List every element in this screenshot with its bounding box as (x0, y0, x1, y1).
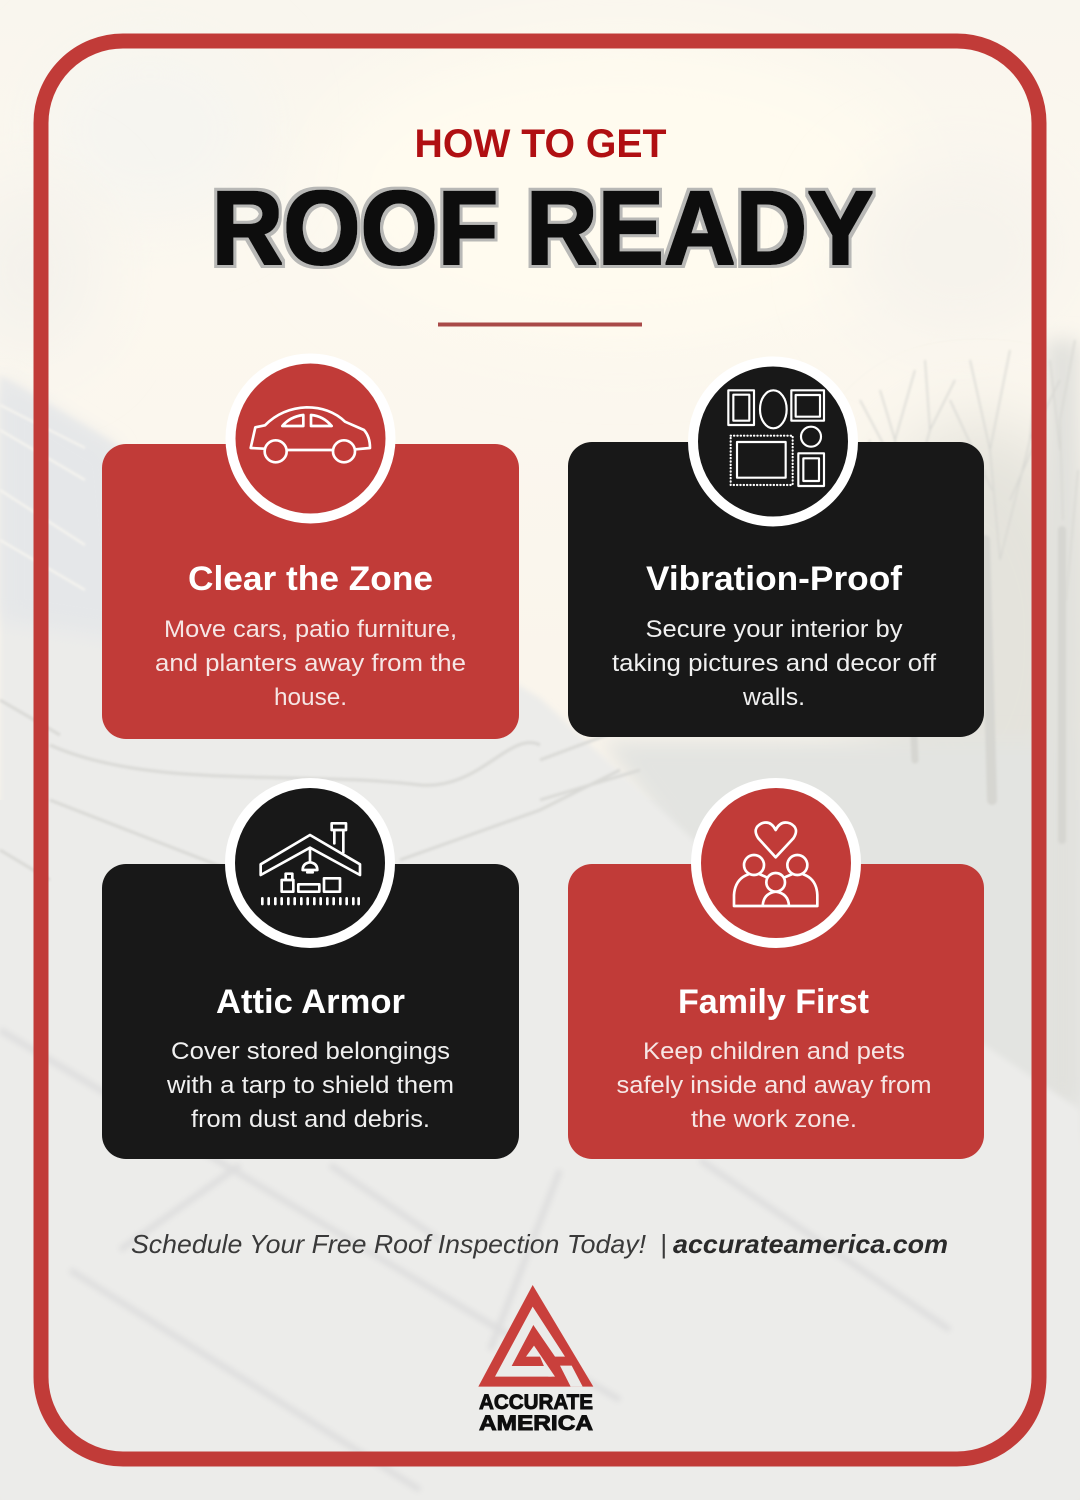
body text: taking pictures and decor off (612, 650, 936, 677)
heading: Attic Armor (216, 983, 405, 1021)
icon: family (734, 822, 817, 906)
heading: Vibration-Proof (646, 560, 903, 598)
eyebrow: how to get: HOW TO GET (414, 122, 666, 166)
body text (612, 616, 936, 711)
badge circle: car (230, 358, 390, 518)
body text: the work zone. (691, 1106, 857, 1133)
logo wordmark: AMERICA (479, 1412, 593, 1435)
badge circle: frames (693, 362, 853, 522)
logo wordmark (479, 1391, 593, 1435)
title divider (438, 322, 642, 326)
card: family first (568, 783, 984, 1159)
call to action: | (660, 1229, 667, 1259)
body text: with a tarp to shield them (166, 1072, 454, 1099)
icon: picture frames (728, 390, 824, 486)
logo mark (478, 1285, 593, 1387)
badge circle: family (696, 783, 856, 943)
body text (616, 1038, 932, 1133)
title block (212, 122, 874, 287)
body text: walls. (742, 684, 805, 711)
icon: attic (261, 823, 360, 904)
heading: Family First (678, 983, 869, 1021)
body text: and planters away from the (155, 650, 466, 677)
body text (155, 616, 466, 711)
body text: Move cars, patio furniture, (164, 616, 457, 643)
body text: safely inside and away from (616, 1072, 932, 1099)
card: clear the zone (102, 358, 519, 739)
call to action: accurateamerica.com (673, 1229, 948, 1259)
call to action: Schedule Your Free Roof Inspection Today! (131, 1229, 646, 1259)
body text (166, 1038, 454, 1133)
body text: house. (274, 684, 347, 711)
main title: roof ready: ROOF READY (212, 170, 874, 287)
icon: car (251, 407, 370, 462)
body text: Secure your interior by (646, 616, 902, 643)
call to action (131, 1229, 948, 1259)
badge circle: attic (230, 783, 390, 943)
card: attic armor (102, 783, 519, 1159)
logo: accurate america (478, 1285, 593, 1435)
card: vibration-proof (568, 362, 984, 737)
body text: Cover stored belongings (171, 1038, 450, 1065)
body text: from dust and debris. (191, 1106, 430, 1133)
heading: Clear the Zone (188, 560, 433, 598)
body text: Keep children and pets (643, 1038, 905, 1065)
logo wordmark: ACCURATE (479, 1391, 593, 1414)
